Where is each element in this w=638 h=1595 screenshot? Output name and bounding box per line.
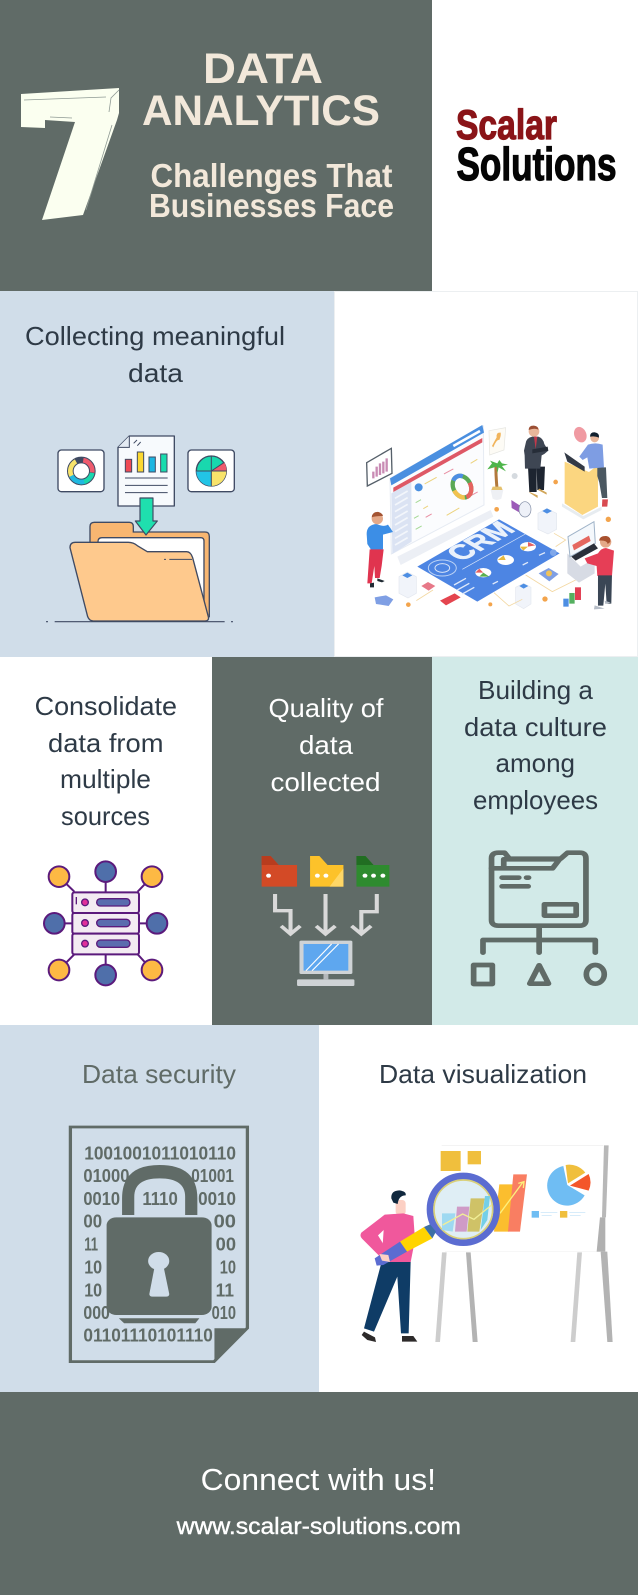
icon: padlock on binary document: 010 <box>212 1303 236 1323</box>
icon: padlock on binary document: 01101110101110 <box>83 1326 213 1346</box>
panel: CRM illustration <box>334 292 638 656</box>
panel: consolidate data <box>0 657 212 1025</box>
icon: padlock on binary document: 00 <box>216 1235 236 1255</box>
heading: quality of data collected <box>268 693 384 797</box>
icon: folder receiving charts <box>46 436 234 622</box>
heading: building a data culture among employees: data culture <box>464 712 607 742</box>
icon: server network <box>44 861 167 985</box>
title: DATA <box>203 45 323 93</box>
heading: building a data culture among employees <box>464 675 607 815</box>
person left <box>367 512 393 587</box>
subtitle: Challenges That <box>150 157 392 194</box>
CRM board <box>417 517 560 602</box>
person at terminal <box>567 522 614 609</box>
heading: building a data culture among employees: employees <box>473 785 598 815</box>
panel: quality of data <box>212 657 432 1025</box>
heading: collecting meaningful data: data <box>128 358 184 388</box>
icon: padlock on binary document: 00 <box>214 1212 236 1232</box>
icon: padlock on binary document <box>70 1127 249 1362</box>
icon: padlock on binary document: 01000 <box>83 1166 129 1186</box>
heading: collecting meaningful data <box>25 321 285 388</box>
heading: data security: Data security <box>82 1059 236 1089</box>
person standing <box>524 426 548 498</box>
icon: padlock on binary document: 10 <box>220 1257 236 1278</box>
icon: padlock on binary document: 11 <box>84 1235 98 1255</box>
CRM board: CRM <box>439 517 523 565</box>
panel: footer <box>0 1392 638 1595</box>
heading: building a data culture among employees: among <box>496 748 575 778</box>
heading: consolidate data from multiple sources: multiple <box>60 764 151 794</box>
heading: collecting meaningful data: Collecting meaningful <box>25 321 285 351</box>
heading: quality of data collected: collected <box>270 767 380 797</box>
icon: padlock on binary document: 00 <box>83 1212 102 1232</box>
subtitle: Businesses Face <box>149 187 394 224</box>
icon: padlock on binary document: 0010 <box>198 1189 236 1209</box>
heading: consolidate data from multiple sources: Consolidate <box>35 691 177 721</box>
heading: building a data culture among employees: Building a <box>478 675 594 705</box>
icon: padlock on binary document: 11 <box>216 1280 234 1301</box>
icon: padlock on binary document: 01001 <box>191 1166 234 1186</box>
website address: www.scalar-solutions.com <box>176 1513 461 1539</box>
analyst figure <box>360 1190 436 1342</box>
icon: folder hierarchy <box>474 853 604 984</box>
icon: padlock on binary document: 000 <box>83 1303 110 1323</box>
icon: padlock on binary document: 0010 <box>83 1189 120 1209</box>
panel: building a data culture <box>432 657 638 1025</box>
subtitle <box>149 157 394 224</box>
icon: padlock on binary document: 10 <box>84 1257 102 1278</box>
heading: data visualization: Data visualization <box>379 1059 587 1089</box>
logo: Scalar Solutions: Scalar <box>456 101 557 148</box>
panel: header <box>0 0 432 291</box>
big number seven <box>21 88 119 220</box>
person at laptop <box>562 425 608 519</box>
heading: quality of data collected: data <box>299 730 354 760</box>
illustration: CRM dashboard team <box>367 425 614 609</box>
data cubes, gears and bars <box>375 500 581 609</box>
logo: Scalar Solutions <box>456 101 616 190</box>
panel: data visualization <box>319 1025 638 1392</box>
heading: quality of data collected: Quality of <box>268 693 384 723</box>
title: ANALYTICS <box>142 87 380 135</box>
icon: padlock on binary document: 1110 <box>142 1189 178 1209</box>
icon: folders flowing into computer <box>262 856 389 986</box>
icon: padlock on binary document: 10 <box>84 1280 102 1301</box>
heading: consolidate data from multiple sources: sources <box>61 801 150 831</box>
illustration: analyst with magnifier and board <box>360 1145 613 1342</box>
footer heading: Connect with us! <box>201 1462 436 1497</box>
heading: consolidate data from multiple sources: data from <box>48 728 164 758</box>
icon: padlock on binary document: 1001001011010110 <box>84 1143 236 1164</box>
title <box>142 45 380 135</box>
heading: consolidate data from multiple sources <box>35 691 177 831</box>
panel: data security <box>0 1025 319 1392</box>
panel: collecting meaningful data <box>0 291 334 657</box>
